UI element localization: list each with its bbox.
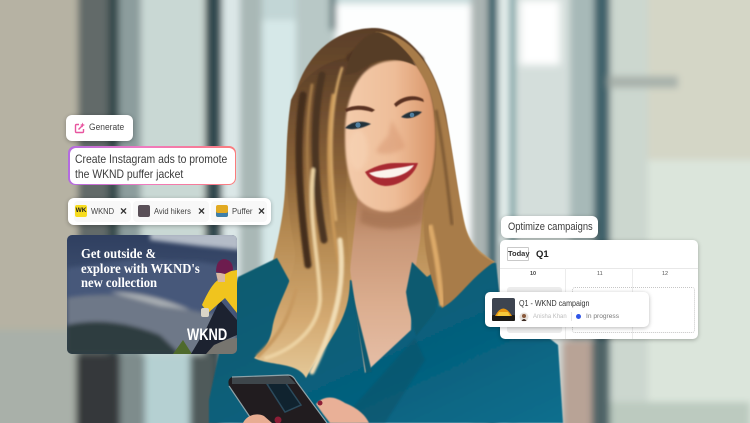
nose <box>376 120 405 154</box>
soft window highlight <box>520 0 560 65</box>
grey event block <box>507 287 562 333</box>
woman <box>209 28 563 423</box>
prompt text: the WKND puffer jacket <box>75 167 183 181</box>
chip: Avid hikers: × <box>198 204 205 218</box>
back hair <box>253 28 495 380</box>
quarter label: Q1 <box>536 249 549 260</box>
campaign calendar <box>500 240 698 339</box>
column dividers <box>565 268 566 339</box>
mouth <box>365 163 418 186</box>
chip: WKND <box>74 201 131 222</box>
prompt box <box>68 146 236 185</box>
today button <box>507 247 529 261</box>
left hair lock <box>254 57 372 378</box>
prompt text <box>75 152 227 181</box>
hiker knee wrap <box>201 308 209 317</box>
icon: generate sparkle <box>74 122 85 134</box>
generate label: Generate <box>89 122 124 133</box>
today button: Today <box>508 249 530 258</box>
chip: Puffer: Puffer <box>232 206 253 216</box>
front hair right <box>375 32 494 308</box>
tag chips <box>68 198 271 225</box>
icon: tent thumbnail <box>492 298 515 321</box>
chip: Puffer: × <box>258 204 265 218</box>
hiker hat <box>216 259 233 274</box>
face <box>345 60 435 212</box>
header rule <box>500 268 698 269</box>
campaign card <box>485 292 649 327</box>
status label: In progress <box>586 312 619 320</box>
ad headline: new collection <box>80 275 157 290</box>
hiker legs <box>191 300 237 354</box>
hiker face <box>216 273 225 282</box>
ad image card <box>67 235 237 354</box>
optimize campaigns pill: Optimize campaigns <box>508 220 593 232</box>
chip: Avid hikers <box>133 201 209 222</box>
eyebrows <box>345 106 375 112</box>
phone <box>228 376 326 423</box>
ad headline <box>80 246 200 290</box>
chip: Avid hikers: Avid hikers <box>154 206 191 216</box>
ad headline: explore with WKND's <box>80 261 199 276</box>
owner name: Anisha Khan <box>533 312 567 320</box>
phone edge <box>229 375 327 423</box>
collar <box>350 262 440 373</box>
campaign calendar: 11 <box>597 271 603 277</box>
prompt text: Create Instagram ads to promote <box>75 152 227 166</box>
generate pill <box>66 115 133 141</box>
hair strands <box>258 45 420 372</box>
eyes <box>345 122 371 129</box>
hand <box>243 414 272 423</box>
campaign title: Q1 - WKND campaign <box>519 298 589 308</box>
chip: WKND: WK <box>76 207 86 214</box>
status divider <box>571 312 572 321</box>
rock <box>206 338 237 354</box>
shirt <box>209 258 563 423</box>
date labels: 10 <box>530 271 536 277</box>
campaign calendar: 12 <box>662 271 668 277</box>
optimize campaigns pill <box>501 216 598 238</box>
dashed drop zone <box>572 287 695 333</box>
ad logo: WKND <box>187 325 227 344</box>
chip: WKND: WKND <box>91 206 114 216</box>
chip: Puffer <box>211 201 267 222</box>
neck <box>350 185 425 373</box>
status dot <box>576 314 581 319</box>
hiker jacket <box>202 270 237 313</box>
icon: avatar <box>520 312 528 322</box>
ad headline: Get outside & <box>80 246 156 261</box>
chip: WKND: × <box>120 204 127 218</box>
cheek highlight <box>348 130 368 170</box>
chin shadow <box>360 195 425 229</box>
